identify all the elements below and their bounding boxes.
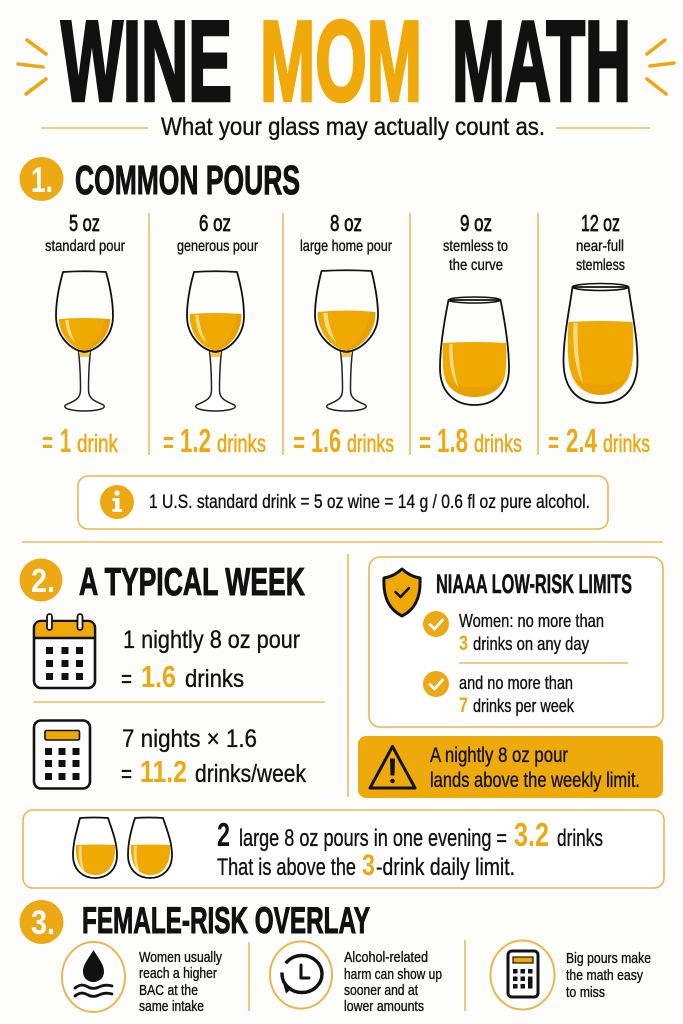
text: weekly total: drinks/week — [195, 760, 306, 788]
text: nightly pour: 1 nightly 8 oz pour — [123, 626, 300, 654]
text: two pours math: 3.2 — [514, 816, 549, 853]
callout: standard drink definition: 1 U.S. standard drink = 5 oz wine = 14 g / 0.6 fl oz pure alcohol. — [149, 491, 590, 513]
panel: 5 oz pour — [42, 210, 126, 459]
text: higher BAC: same intake — [139, 998, 204, 1015]
text: higher BAC: BAC at the — [139, 982, 198, 999]
text: two pours math: -drink daily limit. — [376, 854, 515, 881]
label: equals 1.2 drinks: 1.2 — [180, 422, 211, 459]
panel: NIAAA low-risk limits — [369, 557, 663, 727]
text: big pours: to miss — [566, 984, 605, 1001]
label: equals 1.8 drinks — [419, 422, 522, 459]
panel: 8 oz pour: large home pour — [300, 238, 393, 255]
icon: calendar — [34, 614, 95, 688]
panel: 12 oz pour: near-full — [576, 238, 624, 255]
text: two pours math — [217, 816, 603, 882]
text: higher BAC: Women usually — [139, 949, 222, 966]
label: equals 1.2 drinks: = — [163, 427, 174, 459]
text: two pours math: 3 — [362, 849, 375, 882]
section 2 heading: 2. — [31, 562, 55, 599]
text: weekly limit: and no more than — [459, 672, 573, 693]
callout: warning: A nightly 8 oz pour — [430, 744, 568, 767]
icon: wine glass 8 oz — [315, 270, 378, 411]
title — [61, 0, 631, 126]
text: harm sooner: sooner and at — [344, 982, 419, 999]
icon: wine glass 5 oz — [56, 271, 113, 411]
text: weekly limit: 7 — [459, 694, 468, 717]
label: equals 1 drink: = — [42, 427, 53, 459]
section 2 heading: A TYPICAL WEEK — [79, 561, 305, 604]
text: nightly pour: drinks — [185, 665, 244, 693]
icon: check 1 — [423, 611, 449, 637]
label: equals 1.2 drinks: drinks — [217, 430, 266, 458]
callout: standard drink definition — [78, 476, 608, 529]
text: two pours math: drinks — [557, 825, 603, 852]
panel: 6 oz pour — [163, 210, 266, 459]
panel: 12 oz pour — [548, 210, 650, 459]
text: harm sooner: lower amounts — [344, 998, 424, 1015]
label: equals 2.4 drinks: drinks — [603, 430, 650, 458]
label: equals 1.6 drinks: = — [293, 427, 305, 459]
section 3 heading: 3. — [31, 904, 55, 942]
label: equals 1.6 drinks: drinks — [347, 430, 394, 458]
text: nightly pour — [121, 626, 300, 694]
text: harm sooner: Alcohol-related — [344, 949, 428, 966]
label: equals 2.4 drinks — [548, 422, 650, 459]
title: WINE — [61, 0, 232, 126]
section 1 heading: 1. — [31, 161, 53, 200]
section 1 heading — [20, 157, 300, 203]
icon: info — [100, 485, 134, 519]
panel: 12 oz pour: 12 oz — [581, 210, 620, 236]
text: weekly total: 7 nights × 1.6 — [122, 725, 257, 753]
label: equals 1 drink — [42, 422, 118, 459]
label: equals 1.8 drinks: = — [419, 427, 431, 459]
icon: right title rays — [647, 40, 674, 94]
panel: big pours — [490, 940, 651, 1010]
panel: harm sooner — [270, 942, 442, 1015]
icon: calculator in circle — [490, 940, 554, 1010]
text: weekly total: = — [121, 760, 132, 788]
text: daily limit: 3 — [459, 632, 468, 655]
text: two pours math: large 8 oz pours in one evening = — [239, 825, 507, 852]
text: weekly limit: drinks per week — [473, 695, 575, 716]
text: weekly total: 11.2 — [140, 754, 187, 789]
text: nightly pour: 1.6 — [141, 659, 176, 694]
label: equals 1.8 drinks: 1.8 — [437, 422, 468, 459]
icon: warning triangle — [370, 746, 415, 788]
label: equals 2.4 drinks: 2.4 — [566, 422, 597, 459]
panel: 12 oz pour: stemless — [576, 257, 625, 274]
icon: stemless glass 9 oz — [440, 297, 509, 405]
label: equals 1.6 drinks: 1.6 — [311, 422, 341, 459]
text: weekly total — [121, 725, 306, 789]
label: equals 1.8 drinks: drinks — [474, 430, 522, 458]
panel: 9 oz pour — [419, 210, 522, 459]
panel: 9 oz pour: the curve — [449, 257, 503, 274]
text: daily limit — [459, 610, 604, 655]
panel: 8 oz pour — [293, 210, 394, 459]
section 3 heading — [20, 900, 370, 944]
icon: water drop and waves — [62, 942, 125, 1012]
section 2 heading — [20, 558, 305, 604]
text: two pours math: 2 — [217, 816, 230, 853]
text: harm sooner: harm can show up — [344, 966, 442, 983]
text: weekly limit — [459, 672, 575, 717]
panel: 5 oz pour: standard pour — [45, 238, 126, 255]
panel: 6 oz pour: generous pour — [177, 238, 259, 255]
label: equals 1 drink: 1 — [60, 422, 71, 459]
icon: wine glass 6 oz — [187, 271, 244, 411]
panel: 9 oz pour: 9 oz — [460, 210, 492, 236]
label: equals 1.6 drinks — [293, 422, 394, 459]
text: daily limit: drinks on any day — [473, 633, 590, 654]
text: higher BAC: reach a higher — [139, 965, 217, 982]
label: equals 2.4 drinks: = — [548, 427, 559, 459]
callout: two large pours — [23, 810, 664, 888]
text: higher BAC — [139, 949, 222, 1015]
panel: 6 oz pour: 6 oz — [199, 210, 231, 236]
subtitle: What your glass may actually count as. — [161, 113, 545, 141]
text: nightly pour: = — [121, 665, 132, 693]
icon: stemless glass 12 oz — [564, 284, 638, 403]
label: equals 1 drink: drink — [77, 430, 118, 458]
icon: two stemless glasses — [73, 818, 172, 878]
panel: 9 oz pour: stemless to — [443, 238, 508, 255]
icon: shield — [384, 569, 420, 616]
icon: clock — [270, 942, 332, 1008]
text: harm sooner — [344, 949, 442, 1015]
text: big pours: Big pours make — [566, 950, 651, 967]
text: daily limit: Women: no more than — [459, 610, 604, 631]
icon: check 2 — [423, 671, 449, 697]
text: two pours math: That is above the — [217, 854, 356, 881]
panel: 8 oz pour: 8 oz — [330, 210, 362, 236]
callout: warning — [358, 736, 663, 798]
icon: left title rays — [18, 40, 46, 94]
panel: higher BAC — [62, 942, 222, 1015]
icon: calculator — [34, 720, 90, 788]
text: big pours — [566, 950, 651, 1001]
label: equals 1.2 drinks — [163, 422, 266, 459]
panel: 5 oz pour: 5 oz — [69, 210, 100, 236]
section 3 heading: FEMALE-RISK OVERLAY — [82, 900, 370, 941]
section 1 heading: COMMON POURS — [75, 157, 300, 203]
text: big pours: the math easy — [566, 967, 643, 984]
title: MOM — [260, 0, 422, 126]
